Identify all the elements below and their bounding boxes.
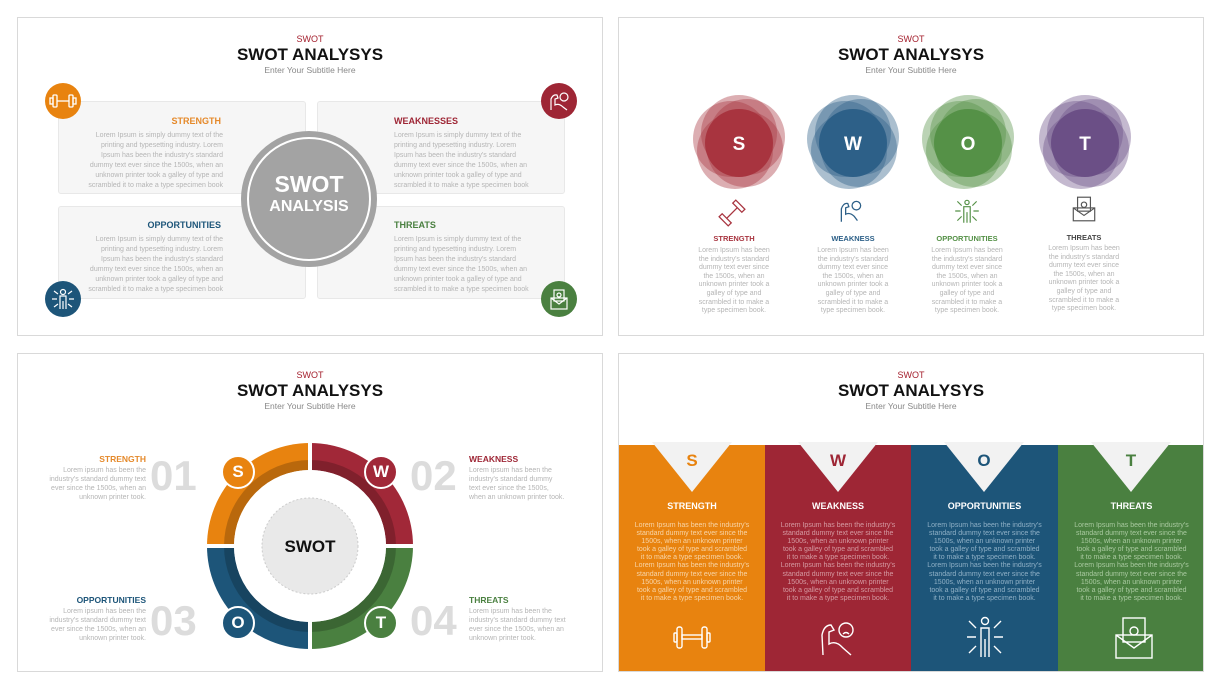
text: strength: industry's standard dummy text [49, 476, 146, 483]
icon: envelope [1115, 617, 1153, 659]
text: threats: printing and typesetting industry. Lorem [394, 246, 516, 253]
icon: dumbbell [673, 626, 711, 649]
text: strength: printing and typesetting industry. Lorem [101, 142, 223, 149]
heading: threats: THREATS [1067, 233, 1101, 242]
text: opportunities: ever since the 1500s, when an [51, 626, 146, 633]
text: strength: unknown printer took. [79, 494, 146, 501]
title label: SWOT [898, 370, 924, 380]
subtitle: Enter Your Subtitle Here [264, 65, 356, 75]
tab triangle T [1092, 442, 1170, 492]
text [927, 522, 1042, 602]
icon: opportunities person [45, 281, 81, 317]
text: it to make a type specimen book. [933, 595, 1036, 602]
text: weaknesses [394, 132, 529, 189]
text: threats: industry's standard dummy text [469, 617, 566, 624]
icon: dumbbell diagonal [718, 199, 746, 227]
text: Lorem Ipsum has been the industry's [927, 562, 1042, 569]
text: took a galley of type and scrambled [637, 546, 747, 553]
text: opportunities: type specimen book. [935, 307, 999, 314]
badge: S: S [232, 462, 244, 481]
text: opportunities: Ipsum has been the industry's standard [101, 256, 223, 263]
heading: opportunities: OPPORTUNITIES [147, 220, 221, 230]
text [781, 522, 895, 602]
text: 1500s, when an unknown printer [1081, 579, 1182, 586]
text: opportunities: unknown printer took. [79, 635, 146, 642]
text: standard dummy text ever since the [783, 530, 893, 537]
text: standard dummy text ever since the [1076, 530, 1187, 537]
title: SWOT ANALYSYS [838, 381, 984, 400]
text: weakness: the industry's standard [818, 256, 888, 263]
blob: T [1039, 95, 1131, 189]
text: weakness: scrambled it to make a [818, 299, 888, 306]
heading: OPPORTUNITIES [948, 501, 1021, 511]
text: it to make a type specimen book. [787, 595, 889, 602]
text: strength: dummy text ever since the 1500s, when an [90, 162, 223, 169]
text: threats: the industry's standard [1049, 254, 1119, 261]
text: threats [469, 608, 566, 642]
text: threats: galley of type and [1057, 288, 1111, 295]
box: threats [317, 206, 565, 299]
text: it to make a type specimen book. [933, 554, 1036, 561]
text: weaknesses: Lorem Ipsum is simply dummy text of the [394, 132, 521, 139]
text: Lorem Ipsum has been the industry's [635, 562, 749, 569]
blob: W [807, 95, 899, 189]
text: weakness: Lorem Ipsum has been [817, 247, 889, 254]
text: opportunities: industry's standard dummy text [49, 617, 146, 624]
text: 1500s, when an unknown printer [934, 579, 1035, 586]
heading: strength: STRENGTH [99, 454, 146, 464]
text: threats: Lorem ipsum has been the [469, 608, 552, 615]
text: threats: Ipsum has been the industry's standard [394, 256, 516, 263]
text: standard dummy text ever since the [637, 530, 747, 537]
text: weaknesses: scrambled it to make a type specimen book [394, 182, 529, 189]
text: strength: the industry's standard [699, 256, 769, 263]
text [1074, 522, 1189, 602]
text: weakness [817, 246, 889, 314]
text: weaknesses: unknown printer took a galley of type and [394, 172, 522, 179]
icon: dumbbell [45, 83, 81, 119]
text: threats: scrambled it to make a type specimen book [394, 286, 529, 293]
heading: STRENGTH [667, 501, 717, 511]
column: threats [1058, 445, 1205, 673]
text: weakness: industry's standard dummy [469, 476, 552, 483]
subtitle: Enter Your Subtitle Here [264, 401, 356, 411]
text: opportunities: the 1500s, when an [936, 273, 998, 280]
text: weakness: Lorem ipsum has been the [469, 467, 552, 474]
badge: T: T [376, 613, 386, 632]
text: weaknesses: dummy text ever since the 1500s, when an [394, 162, 527, 169]
box: weaknesses [317, 101, 565, 194]
text: strength: galley of type and [707, 290, 761, 297]
text: opportunities: dummy text ever since the 1500s, when an [90, 266, 223, 273]
text: it to make a type specimen book. [641, 595, 743, 602]
text: opportunities: Lorem Ipsum has been [931, 247, 1003, 254]
number 03: 03 [150, 597, 197, 644]
text: strength: scrambled it to make a type specimen book [88, 182, 223, 189]
text: took a galley of type and scrambled [783, 587, 893, 594]
text: Lorem Ipsum has been the industry's [635, 522, 749, 529]
text: weakness: text ever since the 1500s, [469, 485, 549, 492]
text: threats: dummy text ever since [1049, 262, 1119, 269]
subtitle: Enter Your Subtitle Here [865, 401, 957, 411]
title label: SWOT [296, 34, 324, 44]
icon: person arrows [967, 616, 1003, 657]
text: strength: Lorem ipsum has been the [63, 467, 146, 474]
text: strength: Ipsum has been the industry's standard [101, 152, 223, 159]
text: took a galley of type and scrambled [929, 546, 1040, 553]
text: weakness: type specimen book. [821, 307, 885, 314]
text: strength [49, 466, 146, 501]
text: it to make a type specimen book. [1080, 595, 1183, 602]
badge: O [221, 606, 255, 640]
text: took a galley of type and scrambled [637, 587, 747, 594]
text: opportunities: scrambled it to make a type specimen book [88, 286, 223, 293]
text: weakness: unknown printer took a [818, 281, 888, 288]
text: Lorem Ipsum has been the industry's [781, 522, 895, 529]
heading: threats: THREATS [469, 595, 509, 605]
column: opportunities [911, 445, 1058, 673]
text: threats [394, 236, 529, 293]
text: 1500s, when an unknown printer [641, 579, 743, 586]
text: opportunities: dummy text ever since [932, 264, 1002, 271]
text: strength: the 1500s, when an [703, 273, 765, 280]
ring chart [207, 443, 413, 649]
box: strength [58, 101, 306, 194]
text: opportunities: galley of type and [940, 290, 994, 297]
text: threats: ever since the 1500s, when an [469, 626, 564, 633]
ring chart: SWOT [284, 537, 336, 556]
heading: opportunities: OPPORTUNITIES [77, 595, 146, 605]
heading: weakness: WEAKNESS [469, 454, 518, 464]
blob: W: W [844, 134, 862, 155]
center circle: swot analysis: SWOT [274, 171, 344, 197]
text: strength: dummy text ever since [699, 264, 769, 271]
tab triangle O: O [977, 451, 991, 470]
blob: T: T [1079, 134, 1091, 155]
text [635, 522, 749, 602]
heading: strength: STRENGTH [713, 234, 755, 243]
heading: weakness: WEAKNESS [831, 234, 875, 243]
text: weaknesses: printing and typesetting industry. Lorem [394, 142, 516, 149]
title: SWOT ANALYSYS [237, 45, 383, 64]
text: it to make a type specimen book. [1080, 554, 1183, 561]
panel: slide 3 ring [17, 353, 603, 672]
text: strength: type specimen book. [702, 307, 766, 314]
tab triangle W: W [830, 451, 847, 470]
title: SWOT ANALYSYS [838, 45, 984, 64]
text: Lorem Ipsum has been the industry's [1074, 562, 1189, 569]
text: weakness [469, 466, 564, 501]
number 04: 04 [410, 597, 457, 644]
text: threats: Lorem Ipsum has been [1048, 245, 1120, 252]
heading: weaknesses: WEAKNESSES [394, 116, 458, 126]
text: opportunities: Lorem ipsum has been the [63, 608, 146, 615]
text: opportunities: printing and typesetting industry. Lorem [101, 246, 223, 253]
text: strength: unknown printer took a [699, 281, 769, 288]
text: opportunities: scrambled it to make a [932, 299, 1002, 306]
badge: T [364, 606, 398, 640]
badge: S [221, 455, 255, 489]
text: it to make a type specimen book. [641, 554, 743, 561]
badge: W [364, 455, 398, 489]
tab triangle O [944, 442, 1024, 492]
heading: THREATS [1111, 501, 1152, 511]
icon: weak arm [821, 622, 854, 656]
text: weaknesses: Ipsum has been the industry's standard [394, 152, 516, 159]
heading: strength: STRENGTH [172, 116, 221, 126]
center circle: swot analysis: ANALYSIS [269, 198, 349, 215]
text: threats [1048, 244, 1120, 312]
column: weakness [765, 445, 911, 673]
heading: opportunities: OPPORTUNITIES [936, 234, 998, 243]
text: 1500s, when an unknown printer [934, 538, 1035, 545]
text: opportunities: unknown printer took a [932, 281, 1002, 288]
text: strength: unknown printer took a galley of type and [95, 172, 223, 179]
blob: S [693, 95, 785, 189]
text: weakness: dummy text ever since [818, 264, 888, 271]
text: standard dummy text ever since the [929, 530, 1040, 537]
text: 1500s, when an unknown printer [641, 538, 743, 545]
text: took a galley of type and scrambled [929, 587, 1040, 594]
badge: O: O [231, 613, 245, 632]
text: threats: Lorem Ipsum is simply dummy text of the [394, 236, 521, 243]
tab triangle S: S [686, 451, 698, 470]
text: opportunities [49, 608, 146, 642]
text: strength: Lorem Ipsum is simply dummy text of the [96, 132, 223, 139]
blob: O [922, 95, 1014, 189]
title label: SWOT [296, 370, 324, 380]
subtitle: Enter Your Subtitle Here [865, 65, 957, 75]
center circle: swot analysis [241, 131, 377, 267]
number 01: 01 [150, 452, 197, 499]
icon: threats envelope [541, 281, 577, 317]
panel: slide 4 columns [618, 353, 1204, 672]
tab triangle W [798, 442, 878, 492]
box: opportunities [58, 206, 306, 299]
icon: person arrows [955, 200, 979, 223]
text: 1500s, when an unknown printer [1081, 538, 1182, 545]
title: SWOT ANALYSYS [237, 381, 383, 400]
text: opportunities [931, 246, 1003, 314]
column: strength [619, 445, 765, 673]
text: threats: type specimen book. [1052, 305, 1116, 312]
icon: weak arm [840, 200, 862, 222]
text: standard dummy text ever since the [929, 571, 1040, 578]
text: took a galley of type and scrambled [783, 546, 893, 553]
tab triangle S [652, 442, 732, 492]
text: 1500s, when an unknown printer [787, 579, 889, 586]
blob: O: O [961, 134, 975, 155]
heading: WEAKNESS [812, 501, 864, 511]
panel: slide 2 blobs [618, 17, 1204, 336]
text: opportunities [88, 236, 223, 293]
text: it to make a type specimen book. [787, 554, 889, 561]
text: took a galley of type and scrambled [1076, 587, 1187, 594]
text: opportunities: unknown printer took a galley of type and [95, 276, 223, 283]
panel: slide 1 quadrant [17, 17, 603, 336]
blob: S: S [733, 134, 745, 155]
text: opportunities: the industry's standard [932, 256, 1002, 263]
text: standard dummy text ever since the [783, 571, 893, 578]
text: standard dummy text ever since the [637, 571, 747, 578]
text: Lorem Ipsum has been the industry's [1074, 522, 1189, 529]
heading: threats: THREATS [394, 220, 436, 230]
text: took a galley of type and scrambled [1076, 546, 1187, 553]
text: threats: unknown printer took a galley of type and [394, 276, 522, 283]
badge: W: W [373, 462, 389, 481]
text: opportunities: Lorem Ipsum is simply dummy text of the [96, 236, 223, 243]
text: strength [698, 246, 770, 314]
text: Lorem Ipsum has been the industry's [781, 562, 895, 569]
text: threats: unknown printer took a [1049, 279, 1119, 286]
text: strength: scrambled it to make a [699, 299, 769, 306]
text: threats: scrambled it to make a [1049, 297, 1119, 304]
icon: weak arm [541, 83, 577, 119]
text: 1500s, when an unknown printer [787, 538, 889, 545]
text: Lorem Ipsum has been the industry's [927, 522, 1042, 529]
text: threats: unknown printer took. [469, 635, 536, 642]
text: threats: the 1500s, when an [1053, 271, 1115, 278]
text: weakness: when an unknown printer took. [469, 494, 564, 501]
text: weakness: galley of type and [826, 290, 880, 297]
number 02: 02 [410, 452, 457, 499]
text: strength: ever since the 1500s, when an [51, 485, 146, 492]
text: strength [88, 132, 223, 189]
text: strength: Lorem Ipsum has been [698, 247, 770, 254]
title label: SWOT [898, 34, 924, 44]
text: weakness: the 1500s, when an [822, 273, 884, 280]
text: threats: dummy text ever since the 1500s, when an [394, 266, 527, 273]
icon: envelope [1072, 196, 1096, 222]
text: standard dummy text ever since the [1076, 571, 1187, 578]
tab triangle T: T [1126, 451, 1137, 470]
